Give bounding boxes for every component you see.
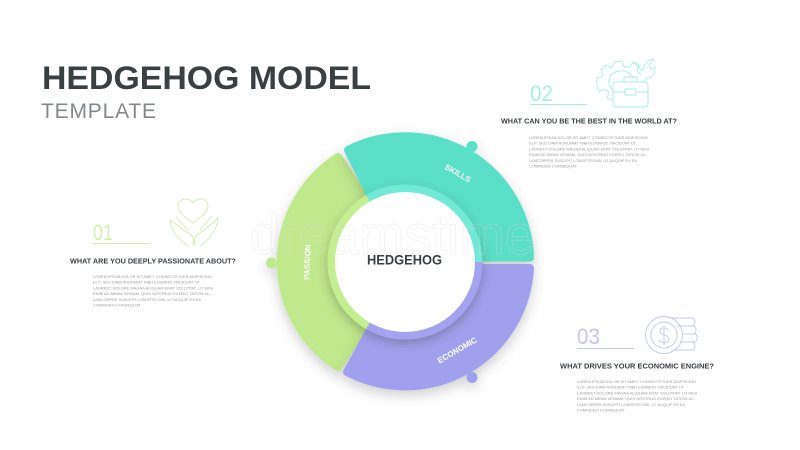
- body text 02: ELIT, SED DIAM NONUMMY NIBH EUISMOD TINCIDUNT UT: [529, 141, 637, 146]
- body text 01: LAMCORPER SUSCIPIT LOBORTIS NISL UT ALIQUIP EX EA: [93, 297, 201, 302]
- body text 01: LAOREET DOLORE MAGNA ALIQUAM ERAT VOLUTPAT. UT WISI: [93, 285, 213, 290]
- number 02: 02: [530, 81, 553, 106]
- body text 02: ENIM AD MINIM VENIAM, QUIS NOSTRUD EXERCI TATION UL-: [529, 152, 648, 157]
- body text 03: LOREM IPSUM DOLOR SIT AMET, CONSECTETUER ADIPISCING: [577, 379, 696, 384]
- icon: heart in hands: [170, 199, 218, 246]
- body text 03: LAMCORPER SUSCIPIT LOBORTIS NISL UT ALIQUIP EX EA: [577, 402, 685, 407]
- body text 01: ENIM AD MINIM VENIAM, QUIS NOSTRUD EXERCI TATION UL-: [93, 291, 212, 296]
- icon: dollar coin and stack: [646, 316, 697, 354]
- body text 02: LOREM IPSUM DOLOR SIT AMET, CONSECTETUER ADIPISCING: [529, 135, 648, 140]
- label: economic: ECONOMIC: [436, 335, 479, 365]
- label: passion: PASSION: [302, 244, 313, 280]
- body text 02: LAMCORPER SUSCIPIT LOBORTIS NISL UT ALIQUIP EX EA: [529, 158, 637, 163]
- body text 03: ENIM AD MINIM VENIAM, QUIS NOSTRUD EXERCI TATION UL-: [577, 396, 696, 401]
- watermark: dreamstime: [250, 203, 535, 266]
- number 01: 01: [93, 220, 113, 245]
- title: [41, 60, 371, 123]
- block 03: economic: [560, 316, 714, 412]
- body text 03: LAOREET DOLORE MAGNA ALIQUAM ERAT VOLUTPAT. UT WISI: [577, 390, 697, 395]
- icon: gear, wrench and briefcase: [597, 59, 655, 107]
- center circle: HEDGEHOG: [367, 252, 442, 268]
- donut chart: [266, 136, 530, 386]
- body text 03: ELIT, SED DIAM NONUMMY NIBH EUISMOD TINCIDUNT UT: [577, 385, 685, 390]
- segment: passion: [266, 157, 365, 367]
- question 01: WHAT ARE YOU DEEPLY PASSIONATE ABOUT?: [70, 256, 236, 266]
- number 03: 03: [577, 324, 600, 349]
- body text 03: [577, 379, 697, 412]
- body text 01: ELIT, SED DIAM NONUMMY NIBH EUISMOD TINCIDUNT UT: [93, 280, 201, 285]
- segment: economic: [347, 268, 530, 386]
- question 02: WHAT CAN YOU BE THE BEST IN THE WORLD AT?: [501, 116, 677, 126]
- inner ring: [327, 184, 482, 340]
- body text 01: LOREM IPSUM DOLOR SIT AMET, CONSECTETUER ADIPISCING: [93, 274, 212, 279]
- body text 01: [93, 274, 213, 308]
- center circle: [335, 192, 475, 332]
- question 03: WHAT DRIVES YOUR ECONOMIC ENGINE?: [560, 362, 714, 370]
- title: HEDGEHOG MODEL: [42, 60, 371, 96]
- block 02: skills: [501, 59, 677, 168]
- title: TEMPLATE: [41, 100, 156, 123]
- body text 02: COMMODO CONSEQUAT: [529, 164, 578, 168]
- body text 02: LAOREET DOLORE MAGNA ALIQUAM ERAT VOLUTPAT. UT WISI: [529, 146, 649, 151]
- body text 01: COMMODO CONSEQUAT: [93, 302, 142, 308]
- label: skills: SKILLS: [443, 162, 473, 185]
- body text 03: COMMODO CONSEQUAT: [577, 408, 626, 412]
- segment: skills: [348, 136, 530, 258]
- body text 02: [529, 135, 649, 168]
- block 01: passion: [70, 199, 236, 308]
